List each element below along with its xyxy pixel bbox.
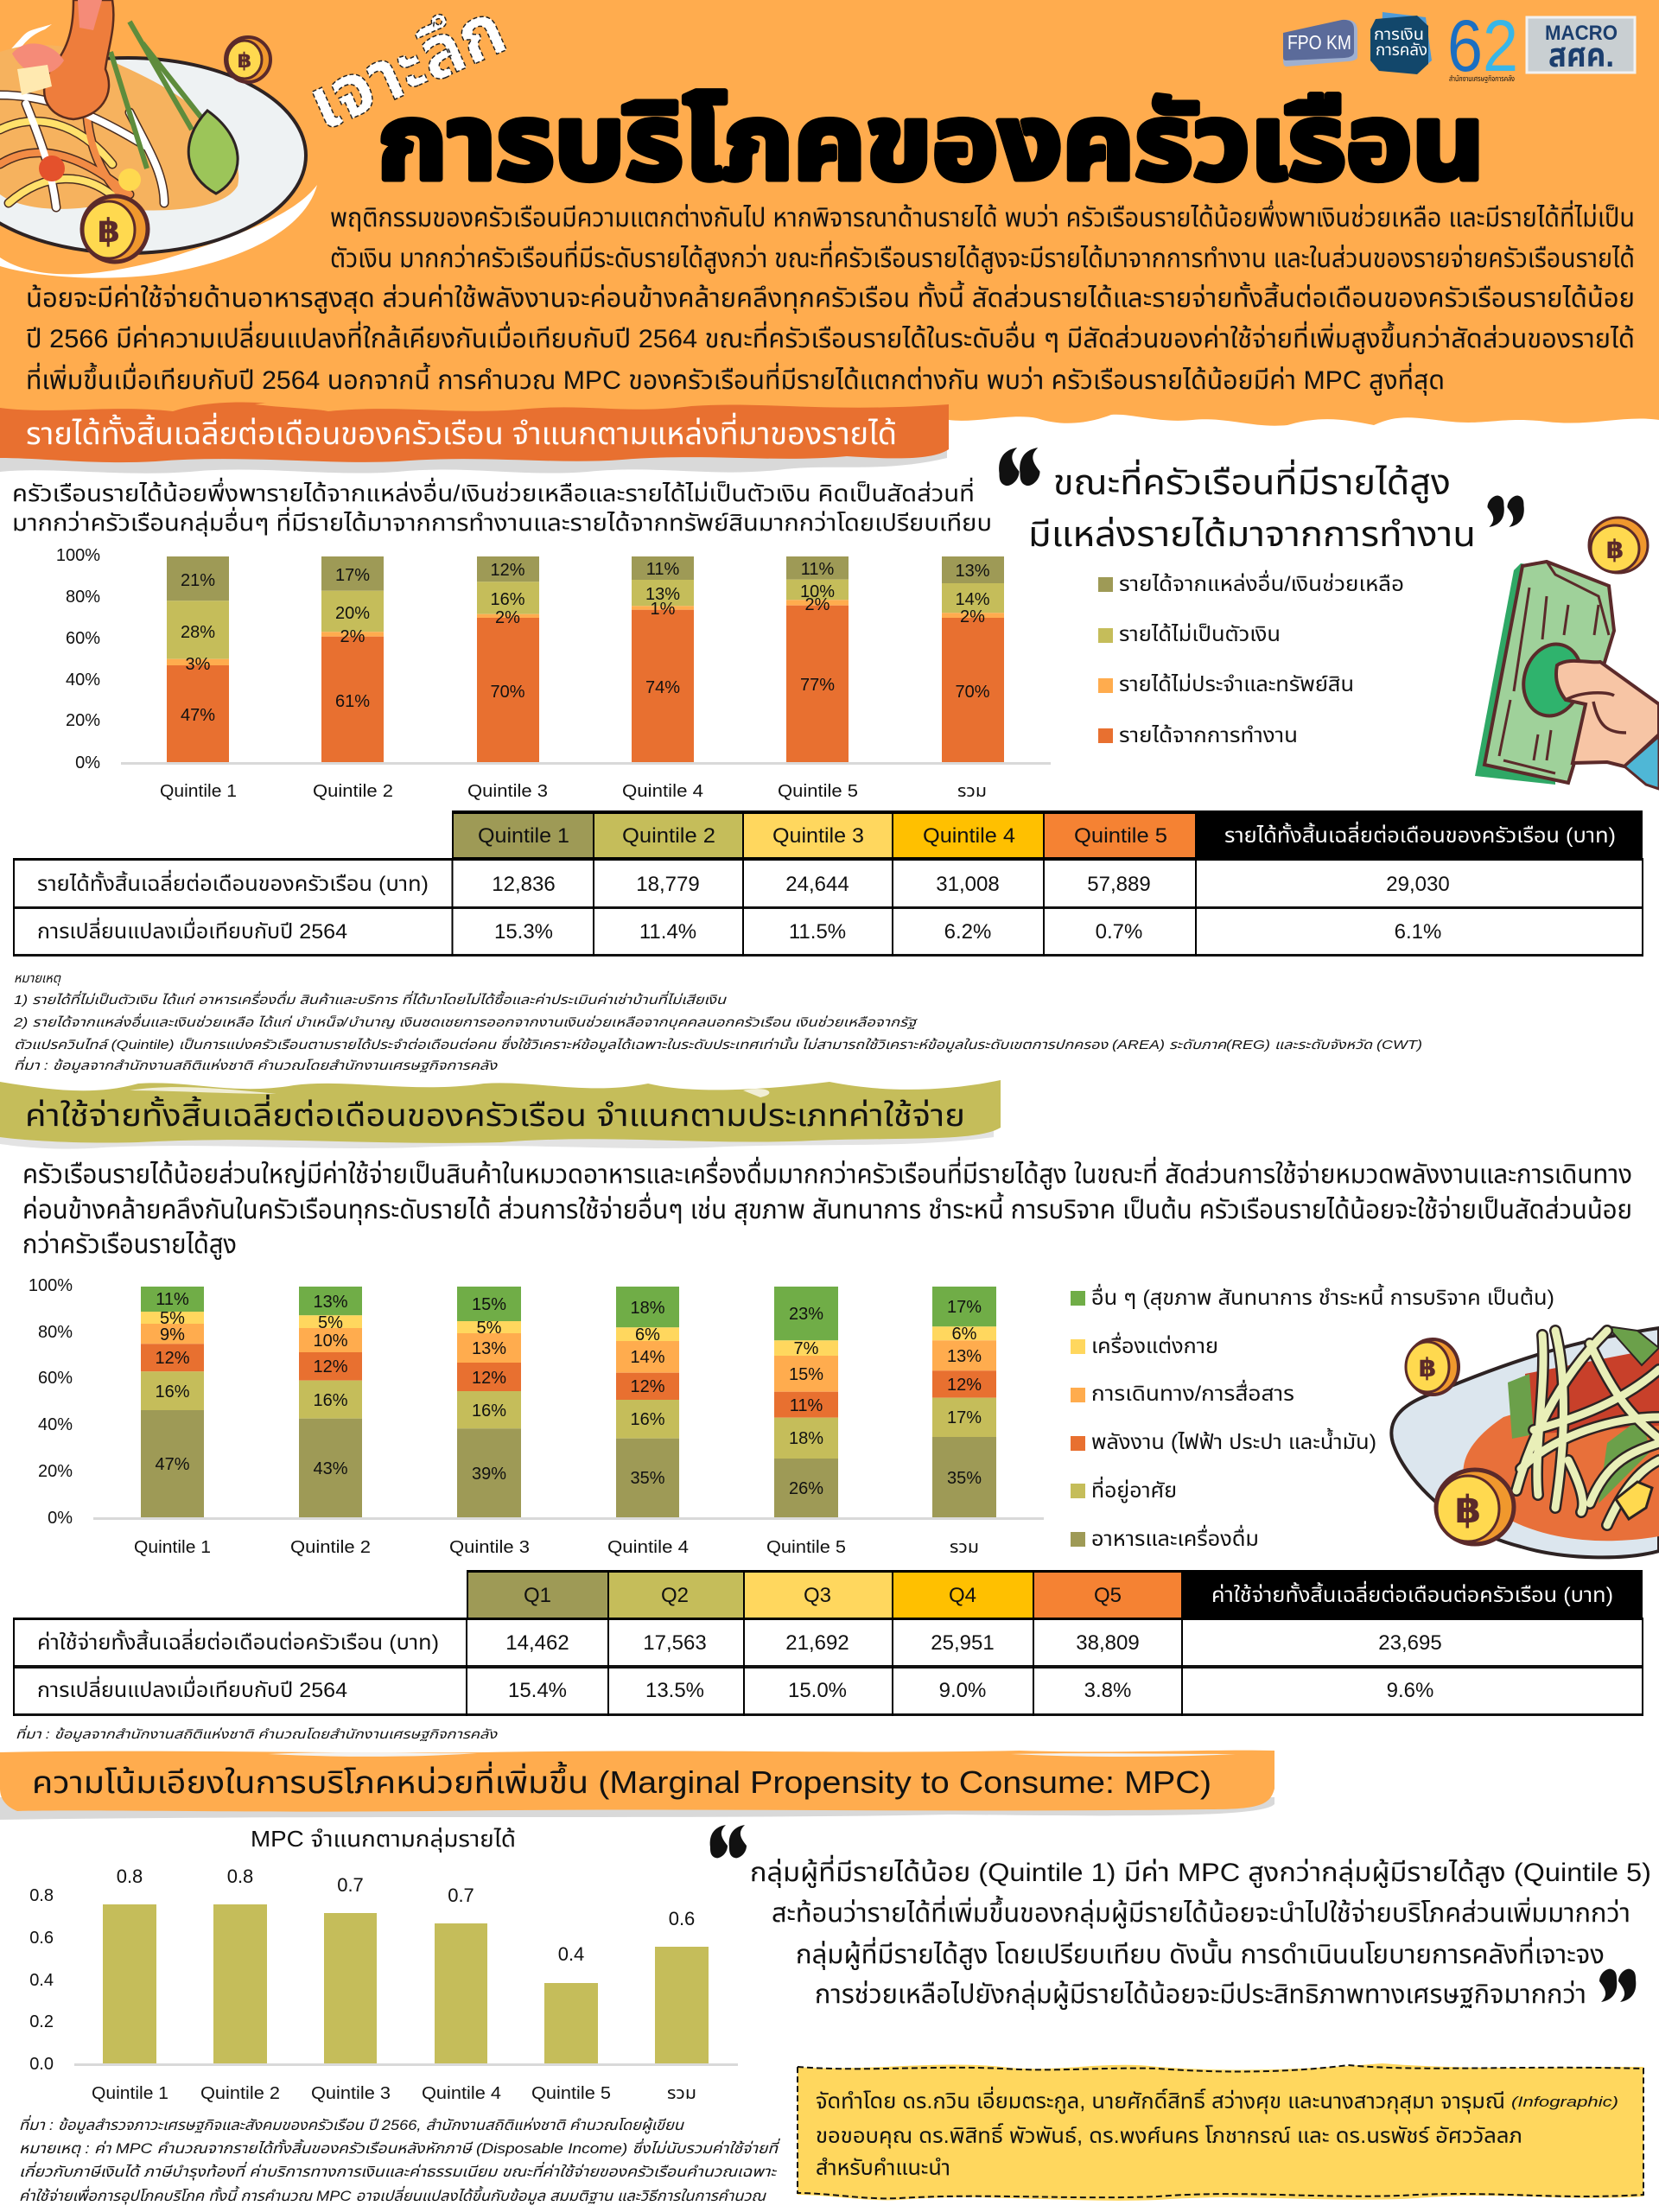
y axis labels: 0.2 [29,2012,54,2031]
table: expenditure: การเปลี่ยนแปลงเมื่อเทียบกับปี 2564 [37,1675,347,1702]
y axis labels: 0.8 [29,1886,54,1905]
table: income: Quintile 5 [1074,824,1167,848]
footnotes: MPC: ค่าใช้จ่ายเพื่อการอุปโภคบริโภค ทั้งนี้ การคำนวณ MPC อาจเปลี่ยนแปลงได้ขึ้นกับข้อมูล สมมติฐาน และวิธีการในการคำนวณ [19,2185,767,2205]
bar: Quintile 4 [632,556,694,762]
quote: MPC findings: การช่วยเหลือไปยังกลุ่มผู้มีรายได้น้อยจะมีประสิทธิภาพทางเศรษฐกิจมากกว่า [815,1980,1586,2010]
table: expenditure: 25,951 [931,1631,995,1655]
table: expenditure: 13.5% [645,1679,704,1702]
heading band: MPC: ความโน้มเอียงในการบริโภคหน่วยที่เพิ่มขึ้น (Marginal Propensity to Consume: MPC) [32,1761,1211,1800]
credits box: สำหรับคำแนะนำ [816,2156,950,2180]
bar: Quintile 2: 13% [313,1293,348,1312]
bar: Quintile 3: 13% [472,1339,506,1358]
bar: Quintile 3: 16% [490,590,525,609]
bar: Quintile 2 [321,556,384,762]
bar: Quintile 4 [616,1287,679,1517]
credits box: ขอขอบคุณ ดร.พิสิทธิ์ พัวพันธ์, ดร.พงศ์นคร โภชากรณ์ และ ดร.นรพัชร์ อัศววัลลภ [816,2122,1522,2149]
legend: expenditure categories: ที่อยู่อาศัย [1091,1476,1177,1503]
bar: total [932,1287,996,1517]
legend: expenditure categories: พลังงาน (ไฟฟ้า ประปา และน้ำมัน) [1091,1427,1376,1454]
quote: high income households: มีแหล่งรายได้มาจากการทำงาน [1028,516,1476,554]
bar: total: 13% [947,1347,982,1366]
bar: Quintile 3: 70% [490,683,525,702]
bar: Quintile 5: 18% [789,1429,823,1448]
footnotes: MPC: เกี่ยวกับภาษีเงินได้ ภาษีบำรุงท้องที่ ค่าบริการทางการเงินและค่าธรรมเนียม ขณะที่ค่าใช้จ่ายของครัวเรือนคำนวณเฉพาะ [19,2161,777,2181]
bar: Quintile 1: 47% [181,706,215,725]
bar: Quintile 4: 14% [630,1348,665,1367]
value labels: 0.8 [117,1866,143,1887]
heading band: expenditure: ค่าใช้จ่ายทั้งสิ้นเฉลี่ยต่อเดือนของครัวเรือน จำแนกตามประเภทค่าใช้จ่าย [25,1094,965,1133]
income summary text: ครัวเรือนรายได้น้อยพึ่งพารายได้จากแหล่งอื่น/เงินช่วยเหลือและรายได้ไม่เป็นตัวเงิน คิดเป็นสัดส่วนที่ [12,477,975,506]
category labels: Quintile 3 [449,1538,530,1557]
expenditure summary text: ครัวเรือนรายได้น้อยส่วนใหญ่มีค่าใช้จ่ายเป็นสินค้าในหมวดอาหารและเครื่องดื่มมากกว่าครัวเรือนที่มีรายได้สูง ในขณะที่ สัดส่วนการใช้จ่ายหมวดพลังงานและการเดินทาง [22,1156,1632,1190]
category labels: รวม [957,782,987,801]
table: income: 15.3% [494,920,553,944]
table: income: รายได้ทั้งสิ้นเฉลี่ยต่อเดือนของครัวเรือน (บาท) [1224,821,1616,848]
bar: total: 2% [960,607,985,626]
icon: coin [1589,518,1648,573]
value labels [117,1866,695,1965]
table: expenditure: 9.6% [1387,1679,1433,1702]
table: income: Quintile 2 [622,824,715,848]
bar: total: 12% [947,1376,982,1395]
bar: Quintile 5: 77% [800,676,835,695]
bar: Quintile 5: 23% [789,1305,823,1324]
icon: large coin: ฿ [1455,1488,1481,1532]
credits box: (Infographic) [1511,2094,1618,2110]
quote: MPC findings: กลุ่มผู้ที่มีรายได้สูง โดยเปรียบเทียบ ดังนั้น การดำเนินนโยบายการคลังที่เจาะจง [796,1936,1605,1970]
footnotes: income: หมายเหตุ [14,971,61,986]
heading band: income: รายได้ทั้งสิ้นเฉลี่ยต่อเดือนของครัวเรือน จำแนกตามแหล่งที่มาของรายได้ [26,412,897,451]
icon: coin top: ฿ [238,48,251,73]
bar: Quintile 1: 47% [155,1455,190,1474]
bar: total [942,556,1004,762]
y axis labels: 20% [38,1462,73,1481]
bar: Quintile 1: 16% [155,1382,190,1402]
quote: MPC findings: สะท้อนว่ารายได้ที่เพิ่มขึ้นของกลุ่มผู้มีรายได้น้อยจะนำไปใช้จ่ายบริโภคส่วนเพิ่มมากกว่า [772,1895,1630,1929]
category labels: Quintile 1 [134,1538,211,1557]
category labels: Quintile 2 [200,2084,280,2103]
bar: Quintile 4: 74% [645,678,680,697]
category labels: Quintile 1 [92,2084,168,2103]
category labels: Quintile 4 [607,1538,689,1557]
table: expenditure: Q3 [804,1584,831,1607]
income summary text: มากกว่าครัวเรือนกลุ่มอื่นๆ ที่มีรายได้มาจากการทำงานและรายได้จากทรัพย์สินมากกว่าโดยเปรียบเทียบ [12,506,992,537]
category labels: Quintile 4 [422,2084,501,2103]
illustration: papaya salad plate [1391,1326,1659,1557]
bar: Quintile 5: 15% [789,1365,823,1384]
legend: income sources [1098,569,1404,747]
logo: การเงินการคลัง: การคลัง [1376,41,1427,60]
bar: Quintile 4: 18% [630,1299,665,1318]
logo: FPO KM: FPO KM [1287,31,1351,54]
bar: Quintile 5: 2% [805,595,830,614]
intro text block: ปี 2566 มีค่าความเปลี่ยนแปลงที่ใกล้เคียงกันเมื่อเทียบกับปี 2564 ขณะที่ครัวเรือนรายได้ในระดับอื่น ๆ มีสัดส่วนของค่าใช้จ่ายที่เพิ่มสูงขึ้นกว่าสัดส่วนของรายได้ [26,321,1635,354]
icon: coin: ฿ [1606,535,1624,565]
bar: Quintile 4: 11% [646,560,679,579]
y axis labels: 40% [38,1415,73,1434]
category labels: Quintile 2 [313,782,393,801]
bar: Quintile 3: 2% [495,608,520,627]
bar: Quintile 1 [167,556,229,762]
table: expenditure: 21,692 [785,1631,849,1655]
heading band: expenditure [0,1080,1001,1149]
category labels [160,782,987,801]
y axis labels [29,1276,73,1528]
table: income: 6.2% [944,920,991,944]
category labels: Quintile 3 [311,2084,391,2103]
heading band: income [0,402,949,474]
logo: การเงินการคลัง: การเงิน [1374,26,1424,44]
legend: income sources: รายได้จากการทำงาน [1119,724,1298,747]
bar: Quintile 1: 12% [155,1349,190,1368]
table: income: รายได้ทั้งสิ้นเฉลี่ยต่อเดือนของครัวเรือน (บาท) [37,869,429,896]
bar: Quintile 4: 12% [630,1377,665,1396]
category labels: รวม [667,2084,696,2103]
value labels: 0.4 [558,1943,584,1965]
category labels: Quintile 2 [290,1538,371,1557]
bar: Quintile 5 [774,1287,838,1517]
bar: Quintile 2: 43% [313,1459,348,1478]
y axis labels: 0% [75,753,100,772]
bar: total: 35% [947,1469,982,1488]
table: expenditure: ค่าใช้จ่ายทั้งสิ้นเฉลี่ยต่อเดือนต่อครัวเรือน (บาท) [37,1628,439,1655]
y axis labels: 0.6 [29,1929,54,1948]
table: income: การเปลี่ยนแปลงเมื่อเทียบกับปี 2564 [37,917,347,944]
table: expenditure: Q4 [949,1584,976,1607]
bar: Quintile 2: 10% [313,1332,348,1351]
value labels: 0.6 [669,1908,695,1929]
y axis labels [29,1886,54,2074]
table: expenditure: Q1 [524,1584,551,1607]
y axis labels: 0% [48,1509,73,1528]
logo: MACRO สศค.: MACRO [1545,22,1618,45]
bar: Quintile 3: 12% [490,561,525,580]
legend: expenditure categories: การเดินทาง/การสื่อสาร [1091,1379,1294,1406]
expenditure summary text: ค่อนข้างคล้ายคลึงกันในครัวเรือนทุกระดับรายได้ ส่วนการใช้จ่ายอื่นๆ เช่น สุขภาพ สันทนาการ ชำระหนี้ การบริจาค เป็นต้น ครัวเรือนรายได้น้อยจะใช้จ่ายเป็นสัดส่วนน้อย [22,1192,1632,1225]
table: income: Quintile 4 [923,824,1015,848]
y axis labels: 60% [38,1369,73,1388]
category labels [134,1538,979,1557]
icon: close quote [1488,496,1524,527]
table: income: 6.1% [1395,920,1441,944]
table: income: Quintile 1 [478,824,569,848]
table: income: 31,008 [936,873,1000,896]
heading band: MPC [0,1751,1274,1820]
bar: Quintile 2: 12% [313,1357,348,1376]
bar: Quintile 5: 26% [789,1479,823,1498]
category labels [92,2084,696,2103]
value labels: 0.7 [448,1885,474,1906]
table: income: Quintile 3 [772,824,864,848]
bar: total: 14% [955,590,990,609]
logo: MACRO สศค. [1527,17,1635,74]
icon: large coin [1436,1470,1514,1544]
footnotes: MPC: หมายเหตุ : ค่า MPC คำนวณจากรายได้ทั้งสิ้นของครัวเรือนหลังหักภาษี (Disposable Income) ซึ่งไม่นับรวมค่าใช้จ่ายที่ [19,2138,780,2158]
icon: small coin: ฿ [1419,1353,1436,1383]
footnotes: MPC [19,2114,780,2205]
value labels: 0.8 [227,1866,253,1887]
intro text block [26,200,1635,396]
footnotes: income: 2) รายได้จากแหล่งอื่นและเงินช่วยเหลือ ได้แก่ บำเหน็จ/บำนาญ เงินชดเชยการออกจากงานเงินช่วยเหลือจากบุคคลนอกครัวเรือน เงินช่วยเหลือจากรัฐ [13,1013,918,1030]
bar: Quintile 2: 61% [335,692,370,711]
table: income: 11.5% [789,920,846,944]
bar: Quintile 3 [477,556,539,762]
table: expenditure: ค่าใช้จ่ายทั้งสิ้นเฉลี่ยต่อเดือนต่อครัวเรือน (บาท) [1211,1580,1613,1607]
bar: Quintile 4: 6% [635,1325,660,1344]
logo: 62 years: สำนักงานเศรษฐกิจการคลัง [1449,74,1515,83]
bar: Quintile 3 [457,1287,521,1517]
bar: Quintile 1: 28% [181,623,215,642]
y axis labels: 0.4 [29,1971,54,1990]
icon: coin bottom: ฿ [98,212,120,250]
table: expenditure [13,1570,1643,1716]
icon: close quote [1599,1969,1636,2002]
bar: Quintile 1: 5% [160,1309,185,1328]
expenditure summary text: กว่าครัวเรือนรายได้สูง [22,1230,237,1260]
bar: Quintile 5: 7% [794,1339,819,1358]
footnotes: income [13,971,1422,1073]
bar chart: MPC by income group [29,1826,738,2103]
table: income: 24,644 [785,873,849,896]
table: expenditure: Q2 [661,1584,689,1607]
bars [103,1904,709,2063]
footnotes: income: 1) รายได้ที่ไม่เป็นตัวเงิน ได้แก่ อาหารเครื่องดื่ม สินค้าและบริการ ที่ได้มาโดยไม่ได้ซื้อและค่าประเมินค่าเช่าบ้านที่ไม่เสียเงิน [14,990,727,1007]
table: expenditure: 38,809 [1076,1631,1140,1655]
quote: MPC findings [710,1825,1651,2010]
background: orange header with torn edge [0,0,1659,432]
stacked bar chart: expenditure by category [29,1276,1044,1557]
y axis labels: 20% [66,711,100,730]
table: income: 11.4% [639,920,696,944]
illustration: pad thai plate [0,0,317,278]
category labels: Quintile 4 [622,782,703,801]
y axis labels: 80% [38,1323,73,1342]
table: expenditure: 9.0% [939,1679,986,1702]
logo: 62 years: 62 [1447,5,1518,86]
bar: total: 17% [947,1298,982,1317]
income summary text [12,477,992,537]
y axis labels: 100% [29,1276,73,1295]
table: expenditure: 15.4% [508,1679,567,1702]
bar: total: 70% [955,683,990,702]
bar: Quintile 2: 5% [318,1313,343,1332]
icon: coin bottom [82,196,148,262]
illustration: hand holding money [1475,518,1659,789]
bar: Quintile 1: 9% [160,1325,185,1344]
bar: Quintile 1: 3% [186,655,211,674]
bar: Quintile 1: 11% [156,1290,189,1309]
title: การบริโภคของครัวเรือน [378,84,1484,201]
footnotes: income: ตัวแปรควินไทล์ (Quintile) เป็นการแบ่งครัวเรือนตามรายได้ประจำต่อเดือนต่อคน ซึ่งใช้วิเคราะห์ข้อมูลได้เฉพาะในระดับประเทศเท่านั้น ไม่สามารถใช้วิเคราะห์ข้อมูลในระดับเขตการปกครอง (AREA) ระดับภาค(REG) และระดับจังหวัด (CWT) [14,1035,1422,1052]
value labels: 0.7 [337,1874,364,1896]
table: expenditure: 3.8% [1084,1679,1131,1702]
category labels: Quintile 5 [531,2084,611,2103]
credits box: จัดทำโดย ดร.กวิน เอี่ยมตระกูล, นายศักดิ์สิทธิ์ สว่างศุข และนางสาวกุสุมา จารุมณี [816,2086,1505,2114]
footnotes: income: ที่มา : ข้อมูลจากสำนักงานสถิติแห่งชาติ คำนวณโดยสำนักงานเศรษฐกิจการคลัง [14,1056,498,1073]
bar: Quintile 3: 5% [477,1319,502,1338]
table: expenditure: 14,462 [505,1631,569,1655]
legend: expenditure categories: อาหารและเครื่องดื่ม [1091,1524,1259,1551]
logo: การเงินการคลัง [1370,12,1432,74]
bar: Quintile 2: 2% [340,627,365,646]
bar: Quintile 3: 16% [472,1402,506,1421]
table: expenditure: 17,563 [643,1631,707,1655]
bar: Quintile 1: 21% [181,571,215,590]
legend: income sources: รายได้ไม่ประจำและทรัพย์สิน [1119,672,1354,696]
category labels: รวม [950,1538,979,1557]
icon: open quote [710,1825,747,1858]
bar: Quintile 4: 13% [645,585,680,604]
y axis labels: 0.0 [29,2055,54,2074]
quote: high income households [999,448,1524,554]
bar: Quintile 3: 15% [472,1295,506,1314]
category labels: Quintile 1 [160,782,237,801]
legend: expenditure categories: เครื่องแต่งกาย [1091,1332,1218,1358]
logos [1283,5,1635,86]
quote: MPC findings: กลุ่มผู้ที่มีรายได้น้อย (Quintile 1) มีค่า MPC สูงกว่ากลุ่มผู้มีรายได้สูง (Quintile 5) [750,1854,1651,1888]
bar: Quintile 5: 10% [800,582,835,601]
expenditure summary text [22,1156,1632,1260]
y axis labels [56,546,100,772]
bar: Quintile 4: 1% [651,600,676,619]
table: income: 18,779 [636,873,700,896]
source note: expenditure: ที่มา : ข้อมูลจากสำนักงานสถิติแห่งชาติ คำนวณโดยสำนักงานเศรษฐกิจการคลัง [16,1725,498,1742]
table: income: 57,889 [1087,873,1151,896]
bar: Quintile 4: 35% [630,1469,665,1488]
bar: Quintile 5: 11% [790,1396,823,1415]
legend: income sources: รายได้จากแหล่งอื่น/เงินช่วยเหลือ [1119,569,1404,596]
bar: Quintile 3: 12% [472,1369,506,1388]
bar: total: 17% [947,1408,982,1427]
y axis labels: 80% [66,588,100,607]
icon: small coin [1406,1339,1459,1395]
bar: total: 6% [952,1325,977,1344]
icon: coin top [226,37,270,82]
chart title: MPC จำแนกตามกลุ่มรายได้ [251,1826,516,1853]
bar: Quintile 1 [141,1287,204,1517]
table: expenditure: 15.0% [788,1679,847,1702]
bar: Quintile 4: 16% [630,1410,665,1429]
quote: high income households: ขณะที่ครัวเรือนที่มีรายได้สูง [1053,459,1451,503]
y axis labels: 100% [56,546,100,565]
bar: total: 13% [955,562,990,581]
logo: MACRO สศค.: สศค. [1548,38,1614,74]
table: income: 12,836 [492,873,556,896]
legend: expenditure categories [1071,1283,1554,1551]
category labels: Quintile 5 [778,782,858,801]
y axis labels: 40% [66,671,100,690]
bar: Quintile 5: 11% [801,560,834,579]
bar: Quintile 2: 17% [335,566,370,585]
intro text block: น้อยจะมีค่าใช้จ่ายด้านอาหารสูงสุด ส่วนค่าใช้พลังงานจะค่อนข้างคล้ายคลึงทุกครัวเรือน ทั้งนี้ สัดส่วนรายได้และรายจ่ายทั้งสิ้นต่อเดือนของครัวเรือนรายได้น้อย [26,280,1635,314]
intro text block: พฤติกรรมของครัวเรือนมีความแตกต่างกันไป หากพิจารณาด้านรายได้ พบว่า ครัวเรือนรายได้น้อยพึ่งพาเงินช่วยเหลือ และมีรายได้ที่ไม่เป็น [330,200,1635,232]
legend: expenditure categories: อื่น ๆ (สุขภาพ สันทนาการ ชำระหนี้ การบริจาค เป็นต้น) [1091,1283,1554,1311]
credits box [798,2063,1643,2201]
table: expenditure: 23,695 [1378,1631,1442,1655]
bar: Quintile 2 [299,1287,362,1517]
category labels: Quintile 3 [467,782,548,801]
bar: Quintile 2: 16% [313,1391,348,1410]
icon: open quote [999,448,1040,486]
bar: Quintile 5 [786,556,849,762]
y axis labels: 60% [66,629,100,648]
intro text block: ที่เพิ่มขึ้นเมื่อเทียบกับปี 2564 นอกจากนี้ การคำนวณ MPC ของครัวเรือนที่มีรายได้แตกต่างกัน พบว่า ครัวเรือนรายได้น้อยมีค่า MPC สูงที่สุด [26,362,1445,396]
legend: income sources: รายได้ไม่เป็นตัวเงิน [1119,622,1281,646]
bar: Quintile 3: 39% [472,1465,506,1484]
category labels: Quintile 5 [766,1538,846,1557]
table: income: 29,030 [1386,873,1450,896]
logo: FPO KM [1283,20,1357,67]
stacked bar chart: income by source [56,546,1051,801]
table: income: 0.7% [1096,920,1142,944]
table: expenditure: Q5 [1094,1584,1122,1607]
bar: Quintile 2: 20% [335,604,370,623]
footnotes: MPC: ที่มา : ข้อมูลสำรวจภาวะเศรษฐกิจและสังคมของครัวเรือน ปี 2566, สำนักงานสถิติแห่งชาติ คำนวณโดยผู้เขียน [19,2114,685,2134]
table: income [13,810,1643,957]
